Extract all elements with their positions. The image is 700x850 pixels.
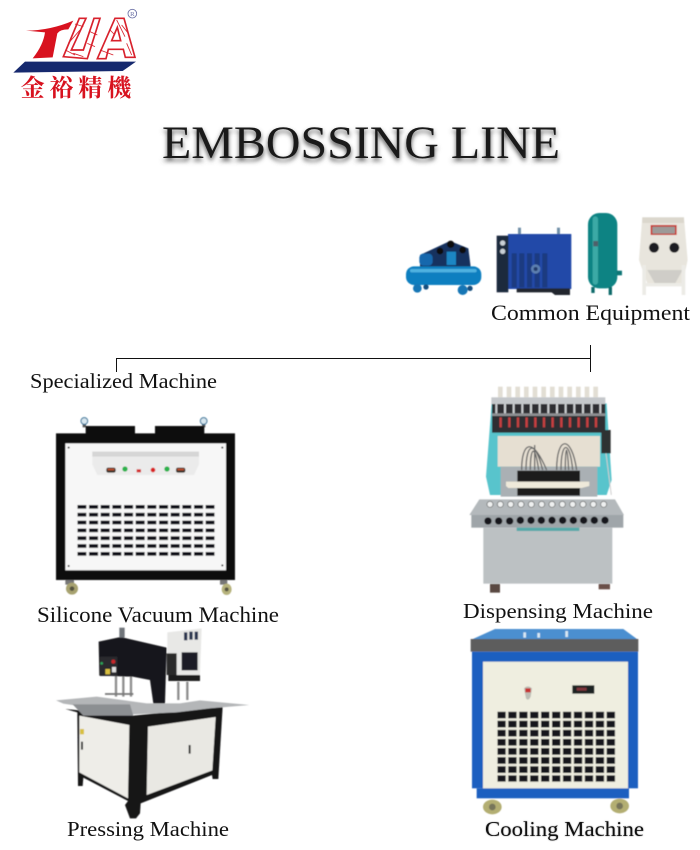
black frame (56, 426, 235, 580)
ventilation slots (77, 505, 215, 557)
tube panel (498, 436, 600, 467)
icon: air dryer (497, 228, 571, 295)
casters (483, 799, 629, 814)
label: cooling machine: Cooling Machine (485, 817, 644, 841)
blue frame (472, 652, 638, 788)
control recess (92, 452, 199, 475)
cream panel (483, 662, 628, 788)
label: specialized machine: Specialized Machine (30, 369, 217, 393)
grey band (471, 639, 638, 652)
gauges (81, 418, 207, 427)
press head (99, 637, 167, 703)
display (572, 685, 594, 694)
vent grid (497, 712, 617, 782)
logo: navy swoosh (13, 62, 136, 73)
label: silicone vacuum machine: Silicone Vacuum Machine (37, 602, 279, 627)
control console (469, 499, 624, 515)
icon: sandblasting cabinet (639, 217, 688, 295)
control pendant (601, 430, 611, 453)
tank top (471, 629, 638, 640)
tube bundles (522, 444, 577, 470)
cabinet base (483, 528, 612, 584)
title: EMBOSSING LINE (162, 120, 560, 172)
knobs (484, 517, 609, 525)
machine: dispensing (469, 387, 624, 593)
machine: pressing (56, 628, 249, 818)
icon: air compressor (406, 241, 481, 295)
label: common equipment: Common Equipment (491, 300, 690, 325)
label: cooling machine: Cooling Machine (485, 817, 644, 841)
feet (490, 584, 500, 593)
teal side panels (486, 403, 612, 495)
label: pressing machine: Pressing Machine (67, 817, 229, 841)
logo (13, 9, 137, 102)
syringes (498, 387, 598, 397)
table frame and legs (65, 707, 223, 818)
control box (167, 628, 202, 675)
syringe rack (491, 397, 605, 404)
connector line (116, 345, 590, 372)
work tables (56, 697, 249, 714)
left door (79, 716, 129, 798)
icon: air tank (588, 213, 622, 295)
right door (147, 717, 216, 795)
machine: cooling (471, 629, 638, 814)
white panel (65, 443, 226, 570)
machine: silicone vacuum (56, 418, 235, 595)
logo: UA letters (63, 18, 135, 59)
title: EMBOSSING LINE (162, 117, 560, 169)
logo: registered mark: R (130, 11, 135, 18)
logo: Chinese name: 金裕精機 (21, 75, 132, 102)
logo: T letter (26, 21, 73, 58)
label: dispensing machine: Dispensing Machine (463, 599, 653, 623)
dials (487, 501, 607, 507)
switch (524, 686, 532, 700)
casters (65, 580, 232, 595)
rods (116, 675, 187, 700)
work table (501, 467, 597, 497)
